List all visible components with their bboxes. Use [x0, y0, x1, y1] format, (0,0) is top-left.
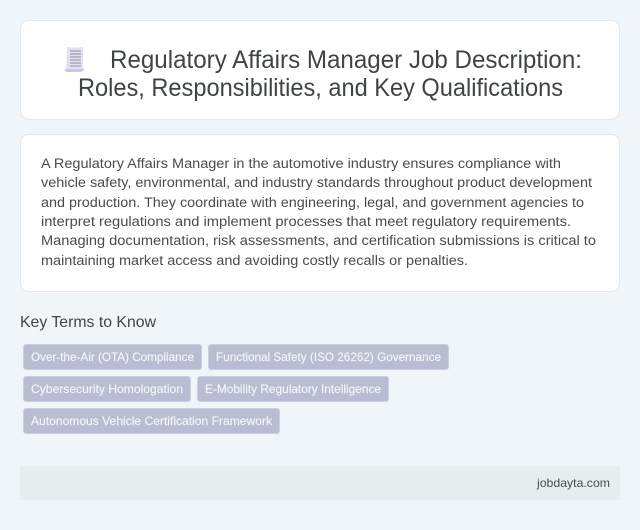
text block: description: A Regulatory Affairs Manager in the automotive industry ensures compliance with	[41, 156, 561, 172]
heading: title: Regulatory Affairs Manager Job Description:	[110, 46, 582, 74]
text block: description: and production. They coordinate with engineering, legal, and government agencies to	[41, 195, 584, 211]
icon: document receipt	[65, 47, 84, 72]
heading: title	[78, 46, 582, 102]
tag list: key terms	[24, 344, 448, 434]
panel: description	[20, 134, 620, 292]
heading: key terms: Key Terms to Know	[20, 314, 156, 331]
panel: title	[20, 20, 620, 120]
text block: description: Managing documentation, risk assessments, and certification submissions is critical to	[41, 233, 596, 249]
text block: description	[41, 156, 596, 269]
footer	[20, 466, 620, 500]
text block: description: maintaining market access and avoiding costly recalls or penalties.	[41, 253, 468, 269]
tag: OTA compliance	[24, 344, 202, 370]
text block: description: interpret regulations and implement processes that meet regulatory requirements.	[41, 214, 571, 230]
tag: e-mobility	[198, 376, 388, 402]
tag: cybersecurity homologation	[24, 376, 190, 402]
heading: title: Roles, Responsibilities, and Key Qualifications	[78, 74, 563, 102]
footer text: source: jobdayta.com	[536, 476, 610, 490]
tag: autonomous vehicle: Autonomous Vehicle Certification Framework	[31, 414, 273, 428]
tag: e-mobility: E-Mobility Regulatory Intelligence	[205, 382, 381, 396]
tag: functional safety	[208, 344, 448, 370]
tag: autonomous vehicle	[24, 408, 280, 434]
tag: OTA compliance: Over-the-Air (OTA) Compliance	[31, 350, 194, 364]
tag: functional safety: Functional Safety (ISO 26262) Governance	[216, 350, 441, 364]
text block: description: vehicle safety, environmental, and industry standards throughout product development	[41, 175, 592, 191]
tag: cybersecurity homologation: Cybersecurity Homologation	[31, 382, 183, 396]
